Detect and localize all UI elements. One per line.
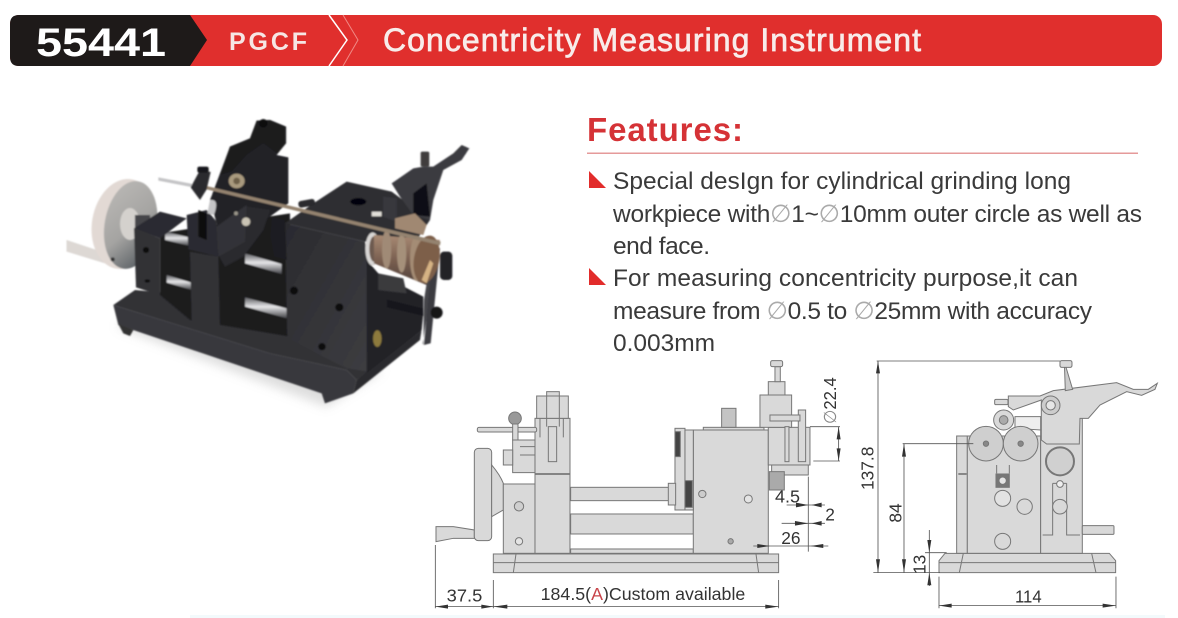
hand wheel and crank bbox=[436, 448, 503, 542]
chevron divider bbox=[329, 15, 358, 66]
header banner bbox=[10, 15, 1162, 66]
feature item 1: Special desIgn for cylindrical grinding long bbox=[613, 168, 1071, 195]
measuring head bbox=[760, 361, 810, 490]
dimension arrows bbox=[876, 361, 1116, 608]
right housing bbox=[668, 408, 768, 553]
dimension labels: 137.8 bbox=[857, 447, 877, 490]
dimension labels bbox=[857, 447, 1042, 606]
model number: 55441 bbox=[36, 21, 166, 65]
centre column bbox=[477, 392, 570, 553]
feature item 1: end face. bbox=[613, 233, 710, 260]
dimension lines bbox=[873, 361, 1116, 608]
photo shadow bbox=[117, 307, 383, 407]
base bbox=[493, 554, 779, 573]
bullet triangle bbox=[589, 268, 606, 285]
feature item 2: 0.003mm bbox=[613, 330, 715, 357]
feature item 1 bbox=[589, 168, 1142, 260]
model number tab bbox=[10, 15, 207, 66]
hand wheel and crank bbox=[67, 174, 164, 274]
measuring head bbox=[365, 145, 469, 345]
holes and clamps bbox=[995, 447, 1074, 549]
dimension labels: 2 bbox=[825, 505, 835, 525]
dimension labels: 26 bbox=[781, 528, 801, 548]
guide rods bbox=[165, 232, 287, 318]
feature item 2: For measuring concentricity purpose,it can bbox=[613, 265, 1078, 292]
dimension lines bbox=[435, 427, 840, 608]
series code: PGCF bbox=[229, 28, 307, 56]
upper lever bbox=[994, 361, 1157, 444]
base plate bbox=[113, 290, 422, 403]
side view technical drawing bbox=[435, 361, 841, 609]
bullet triangle bbox=[589, 171, 606, 188]
feature item 2: measure from ∅0.5 to ∅25mm with accuracy bbox=[613, 298, 1093, 325]
product photo bbox=[67, 119, 469, 407]
dimension labels bbox=[447, 377, 840, 606]
left block bbox=[503, 484, 535, 553]
body bbox=[957, 417, 1114, 553]
dimension labels: 84 bbox=[885, 503, 905, 523]
feature item 2 bbox=[589, 265, 1093, 357]
dimension labels: 37.5 bbox=[447, 586, 482, 606]
heading rule bbox=[587, 152, 1138, 154]
workpiece shaft bbox=[158, 167, 441, 245]
dimension labels: ∅22.4 bbox=[820, 377, 840, 424]
dark backing between columns bbox=[160, 213, 290, 337]
twin rollers bbox=[969, 426, 1038, 461]
front view technical drawing bbox=[857, 361, 1157, 608]
left column block bbox=[134, 212, 187, 295]
base bbox=[939, 553, 1116, 573]
guide rods bbox=[571, 487, 693, 553]
title: Concentricity Measuring Instrument bbox=[383, 22, 921, 58]
dimension arrows bbox=[435, 427, 841, 609]
feature item 1: workpiece with∅1~∅10mm outer circle as well as bbox=[612, 201, 1142, 228]
right measuring block bbox=[270, 182, 430, 373]
dimension labels: 13 bbox=[909, 555, 929, 574]
dimension labels: 114 bbox=[1015, 586, 1042, 606]
dimension labels: 4.5 bbox=[775, 487, 800, 507]
dimension labels: 184.5(A)Custom available bbox=[541, 584, 745, 604]
features heading: Features: bbox=[587, 111, 743, 148]
centre support column bbox=[187, 119, 288, 332]
